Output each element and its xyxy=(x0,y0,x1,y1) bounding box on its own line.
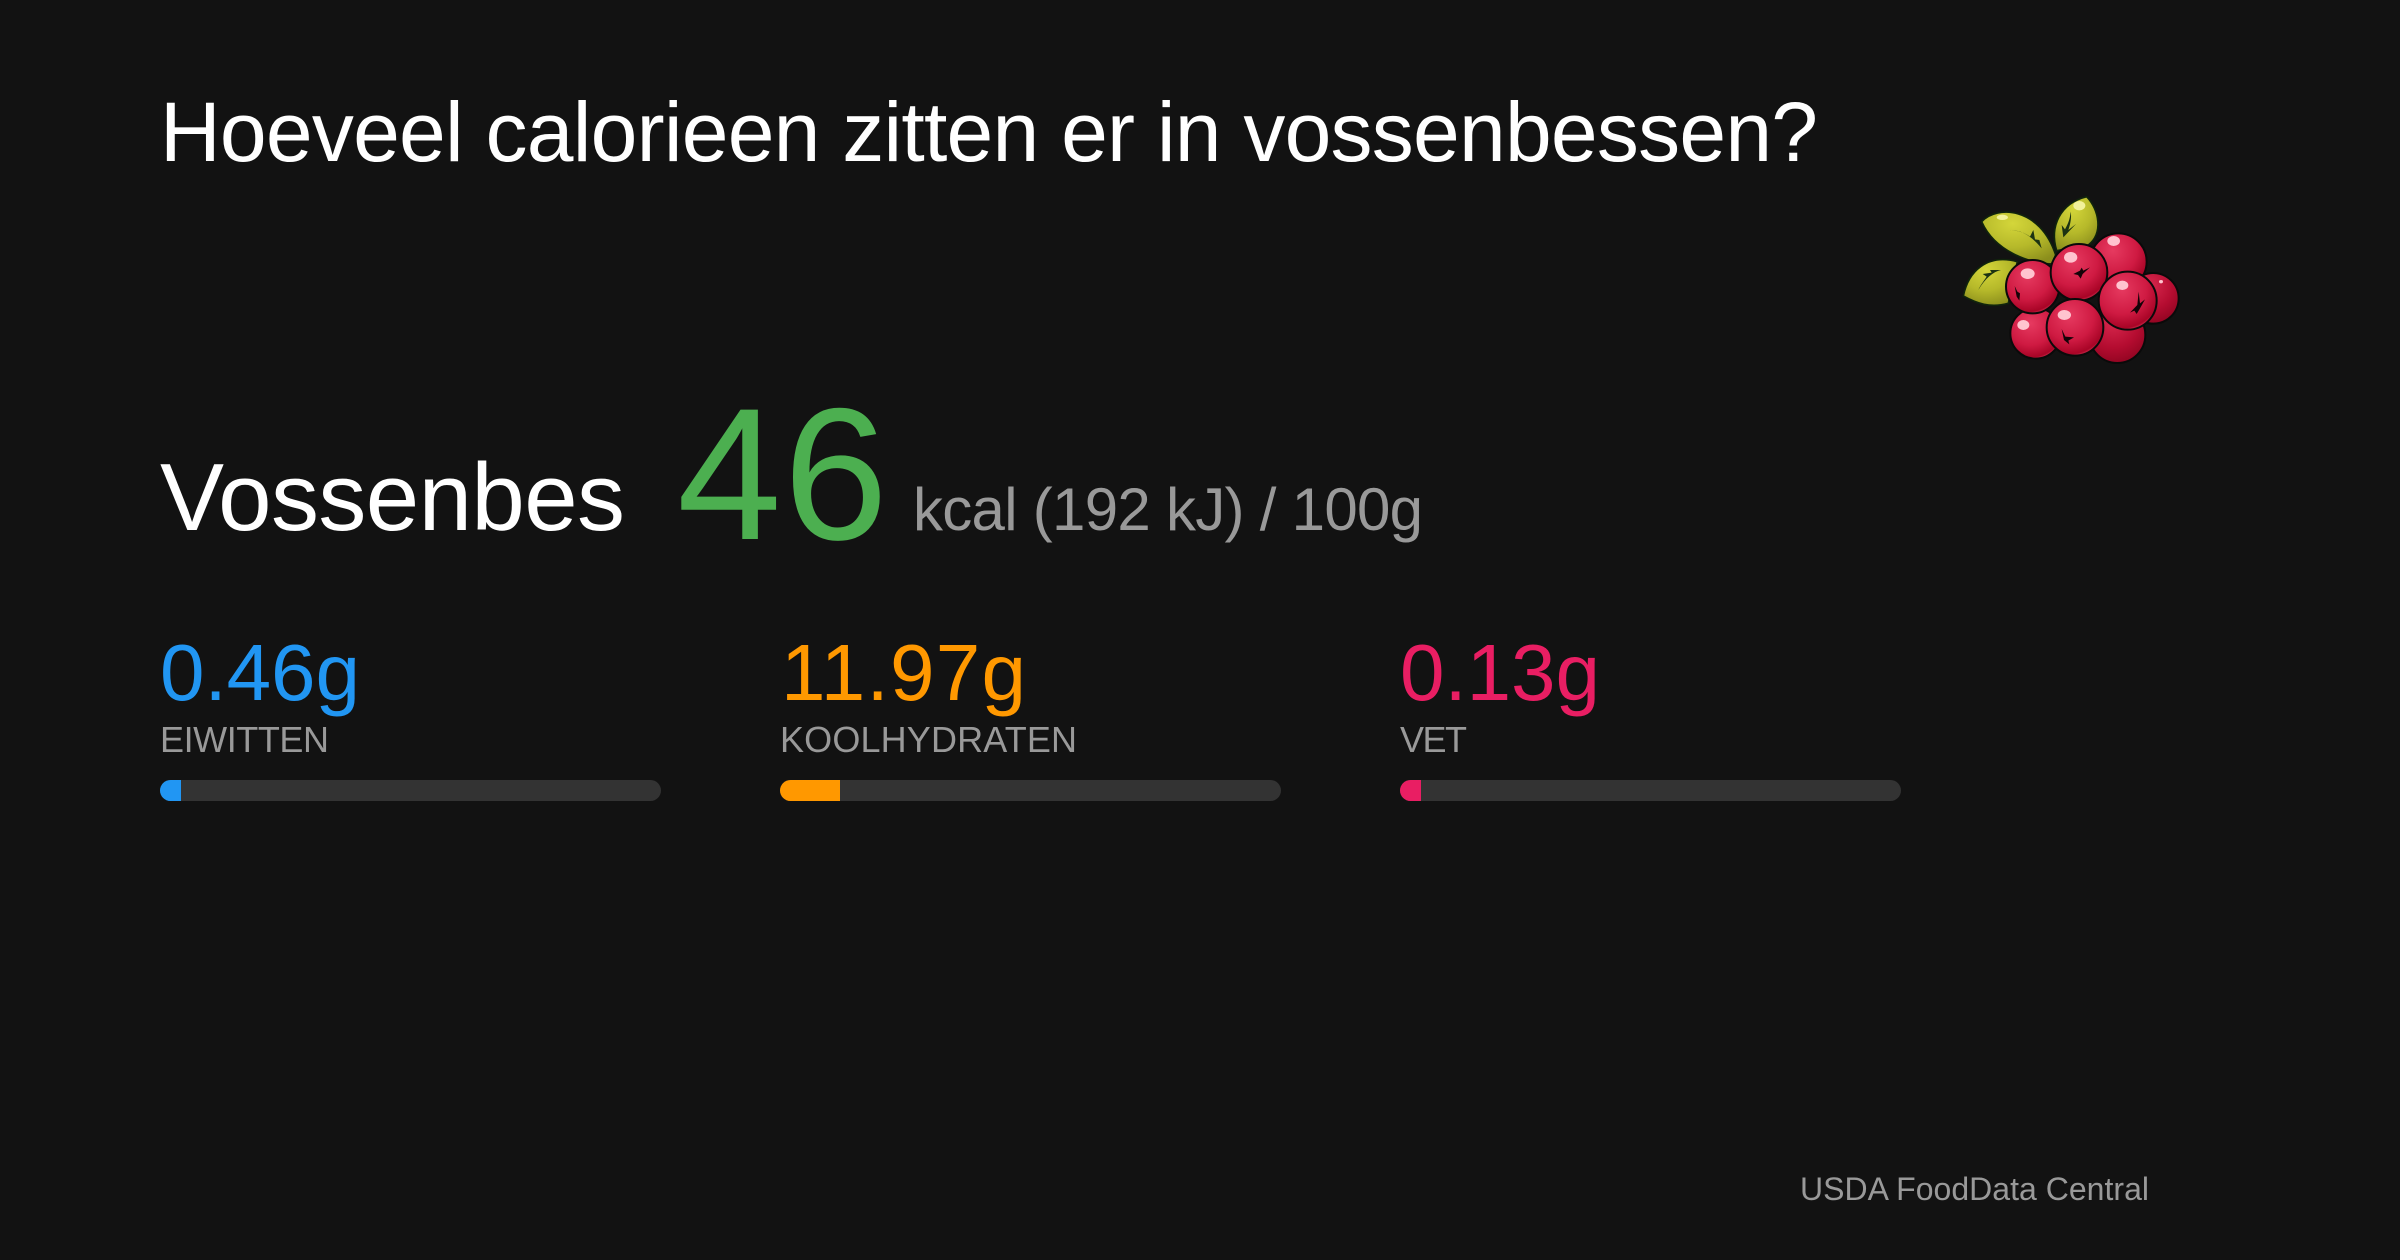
berries: front xyxy=(2006,244,2157,356)
leaf: top xyxy=(2054,197,2098,251)
berries: back xyxy=(2010,233,2179,363)
leaf: large xyxy=(1982,212,2056,264)
berry highlights xyxy=(2017,236,2163,330)
carbohydrates bar xyxy=(780,780,1281,801)
fat label: VET xyxy=(1400,719,1467,760)
source: USDA FoodData Central xyxy=(1800,1171,2149,1207)
protein label: EIWITTEN xyxy=(160,719,329,760)
carbohydrates value: 11.97g xyxy=(781,628,1026,717)
protein bar xyxy=(160,780,661,801)
macro: carbohydrates xyxy=(780,628,1281,801)
icon: lingonberry cluster xyxy=(1963,197,2179,363)
product name: Vossenbes xyxy=(160,444,625,551)
macro: protein xyxy=(160,628,661,801)
fat value: 0.13g xyxy=(1400,628,1600,717)
macro: fat xyxy=(1400,628,1901,801)
fat bar xyxy=(1400,780,1901,801)
carbohydrates label: KOOLHYDRATEN xyxy=(780,719,1077,760)
berry calyx marks xyxy=(2015,267,2145,344)
protein value: 0.46g xyxy=(160,628,360,717)
calorie value: 46 xyxy=(677,369,888,579)
title: Hoeveel calorieen zitten er in vossenbessen? xyxy=(160,85,1818,179)
leaf: left xyxy=(1963,260,2017,305)
calorie unit: kcal (192 kJ) / 100g xyxy=(913,476,1423,543)
